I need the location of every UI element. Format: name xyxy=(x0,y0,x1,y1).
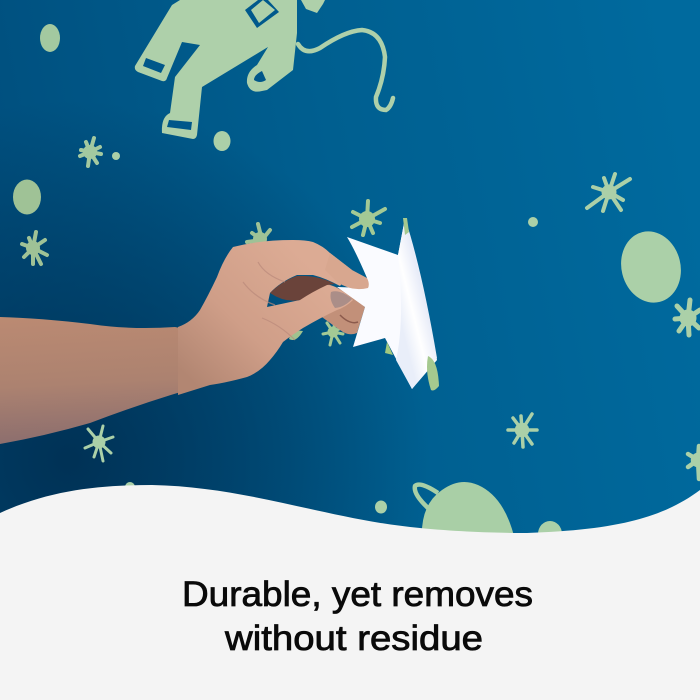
icon: ringed planet xyxy=(415,482,515,540)
hand palm and thumb xyxy=(178,240,353,395)
green patch behind star sticker xyxy=(385,342,393,355)
headline: without residue xyxy=(224,619,483,658)
icon: astronaut sticker xyxy=(135,0,393,139)
star: far right xyxy=(688,446,700,479)
star: centre top xyxy=(352,201,385,235)
white star sticker being peeled xyxy=(337,218,439,390)
arm and hand behind the sticker xyxy=(0,240,365,444)
headline: Durable, yet removes xyxy=(182,575,533,614)
star: left xyxy=(22,232,47,264)
star: lower right xyxy=(508,414,537,447)
knuckle creases xyxy=(243,262,295,340)
index fingertip over the sticker xyxy=(325,253,369,289)
peeled green edge xyxy=(403,218,409,235)
star: upper left xyxy=(80,138,101,166)
headline xyxy=(182,575,533,658)
star: below hand xyxy=(323,322,343,345)
palm shadow xyxy=(270,276,335,301)
dots and planets xyxy=(13,24,688,547)
star stickers xyxy=(22,138,700,479)
background wall xyxy=(0,0,700,560)
thumbnail xyxy=(330,291,352,308)
small green patch under hand xyxy=(289,330,303,340)
back fingers xyxy=(290,280,365,334)
arm xyxy=(0,317,240,444)
white wave panel xyxy=(0,485,700,700)
star: right edge xyxy=(675,300,700,335)
star: lower left xyxy=(85,426,113,461)
star: top right xyxy=(587,174,630,211)
star: behind hand xyxy=(247,224,270,244)
